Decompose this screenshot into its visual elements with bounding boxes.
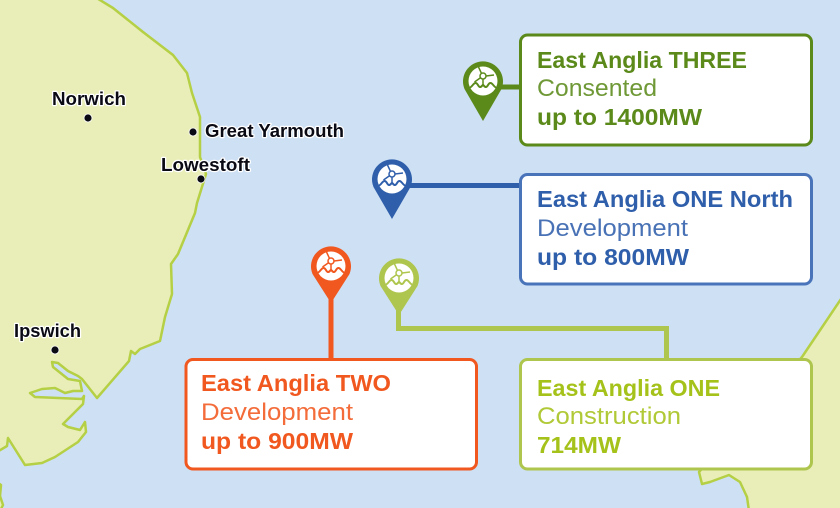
city: Norwich: [52, 89, 126, 122]
panel: East Anglia ONE North: East Anglia ONE North: [537, 186, 793, 212]
city: Ipswich: Ipswich: [14, 321, 81, 341]
panel: East Anglia THREE: up to 1400MW: [537, 104, 702, 130]
pin: East Anglia THREE: [463, 61, 503, 121]
panel: East Anglia THREE: Consented: [537, 75, 657, 102]
land: Kent corner: [0, 482, 3, 508]
panel: East Anglia ONE: East Anglia ONE: [537, 375, 720, 401]
panel: East Anglia TWO: [186, 360, 476, 469]
panel: East Anglia TWO: up to 900MW: [201, 428, 353, 454]
connector: East Anglia ONE: [398, 308, 666, 358]
panel: East Anglia TWO: Development: [201, 399, 353, 426]
panel: East Anglia ONE: Construction: [537, 403, 681, 430]
panel: East Anglia ONE North: up to 800MW: [537, 244, 689, 270]
city: Great Yarmouth: Great Yarmouth: [205, 121, 344, 141]
land: continental coast: [699, 296, 840, 508]
pin: East Anglia ONE North: [372, 159, 412, 219]
connector: East Anglia TWO: [328, 298, 334, 358]
city: Lowestoft: [161, 155, 250, 183]
panel: East Anglia ONE: [520, 360, 812, 469]
panel: East Anglia ONE North: [520, 174, 812, 284]
city: Lowestoft: Lowestoft: [161, 155, 250, 175]
city: Norwich: Norwich: [52, 89, 126, 109]
panel: East Anglia ONE: 714MW: [537, 432, 621, 458]
panel: East Anglia ONE North: Development: [537, 215, 688, 242]
panel: East Anglia THREE: [520, 35, 812, 145]
city: Ipswich: [14, 321, 81, 354]
land: East Anglia coast: [0, 0, 206, 465]
panel: East Anglia TWO: East Anglia TWO: [201, 370, 391, 396]
connector: East Anglia THREE: [500, 84, 520, 90]
connector: East Anglia ONE North: [410, 183, 520, 188]
panel: East Anglia THREE: East Anglia THREE: [537, 47, 747, 73]
pin: East Anglia ONE: [379, 258, 419, 315]
pin: East Anglia TWO: [311, 246, 351, 303]
